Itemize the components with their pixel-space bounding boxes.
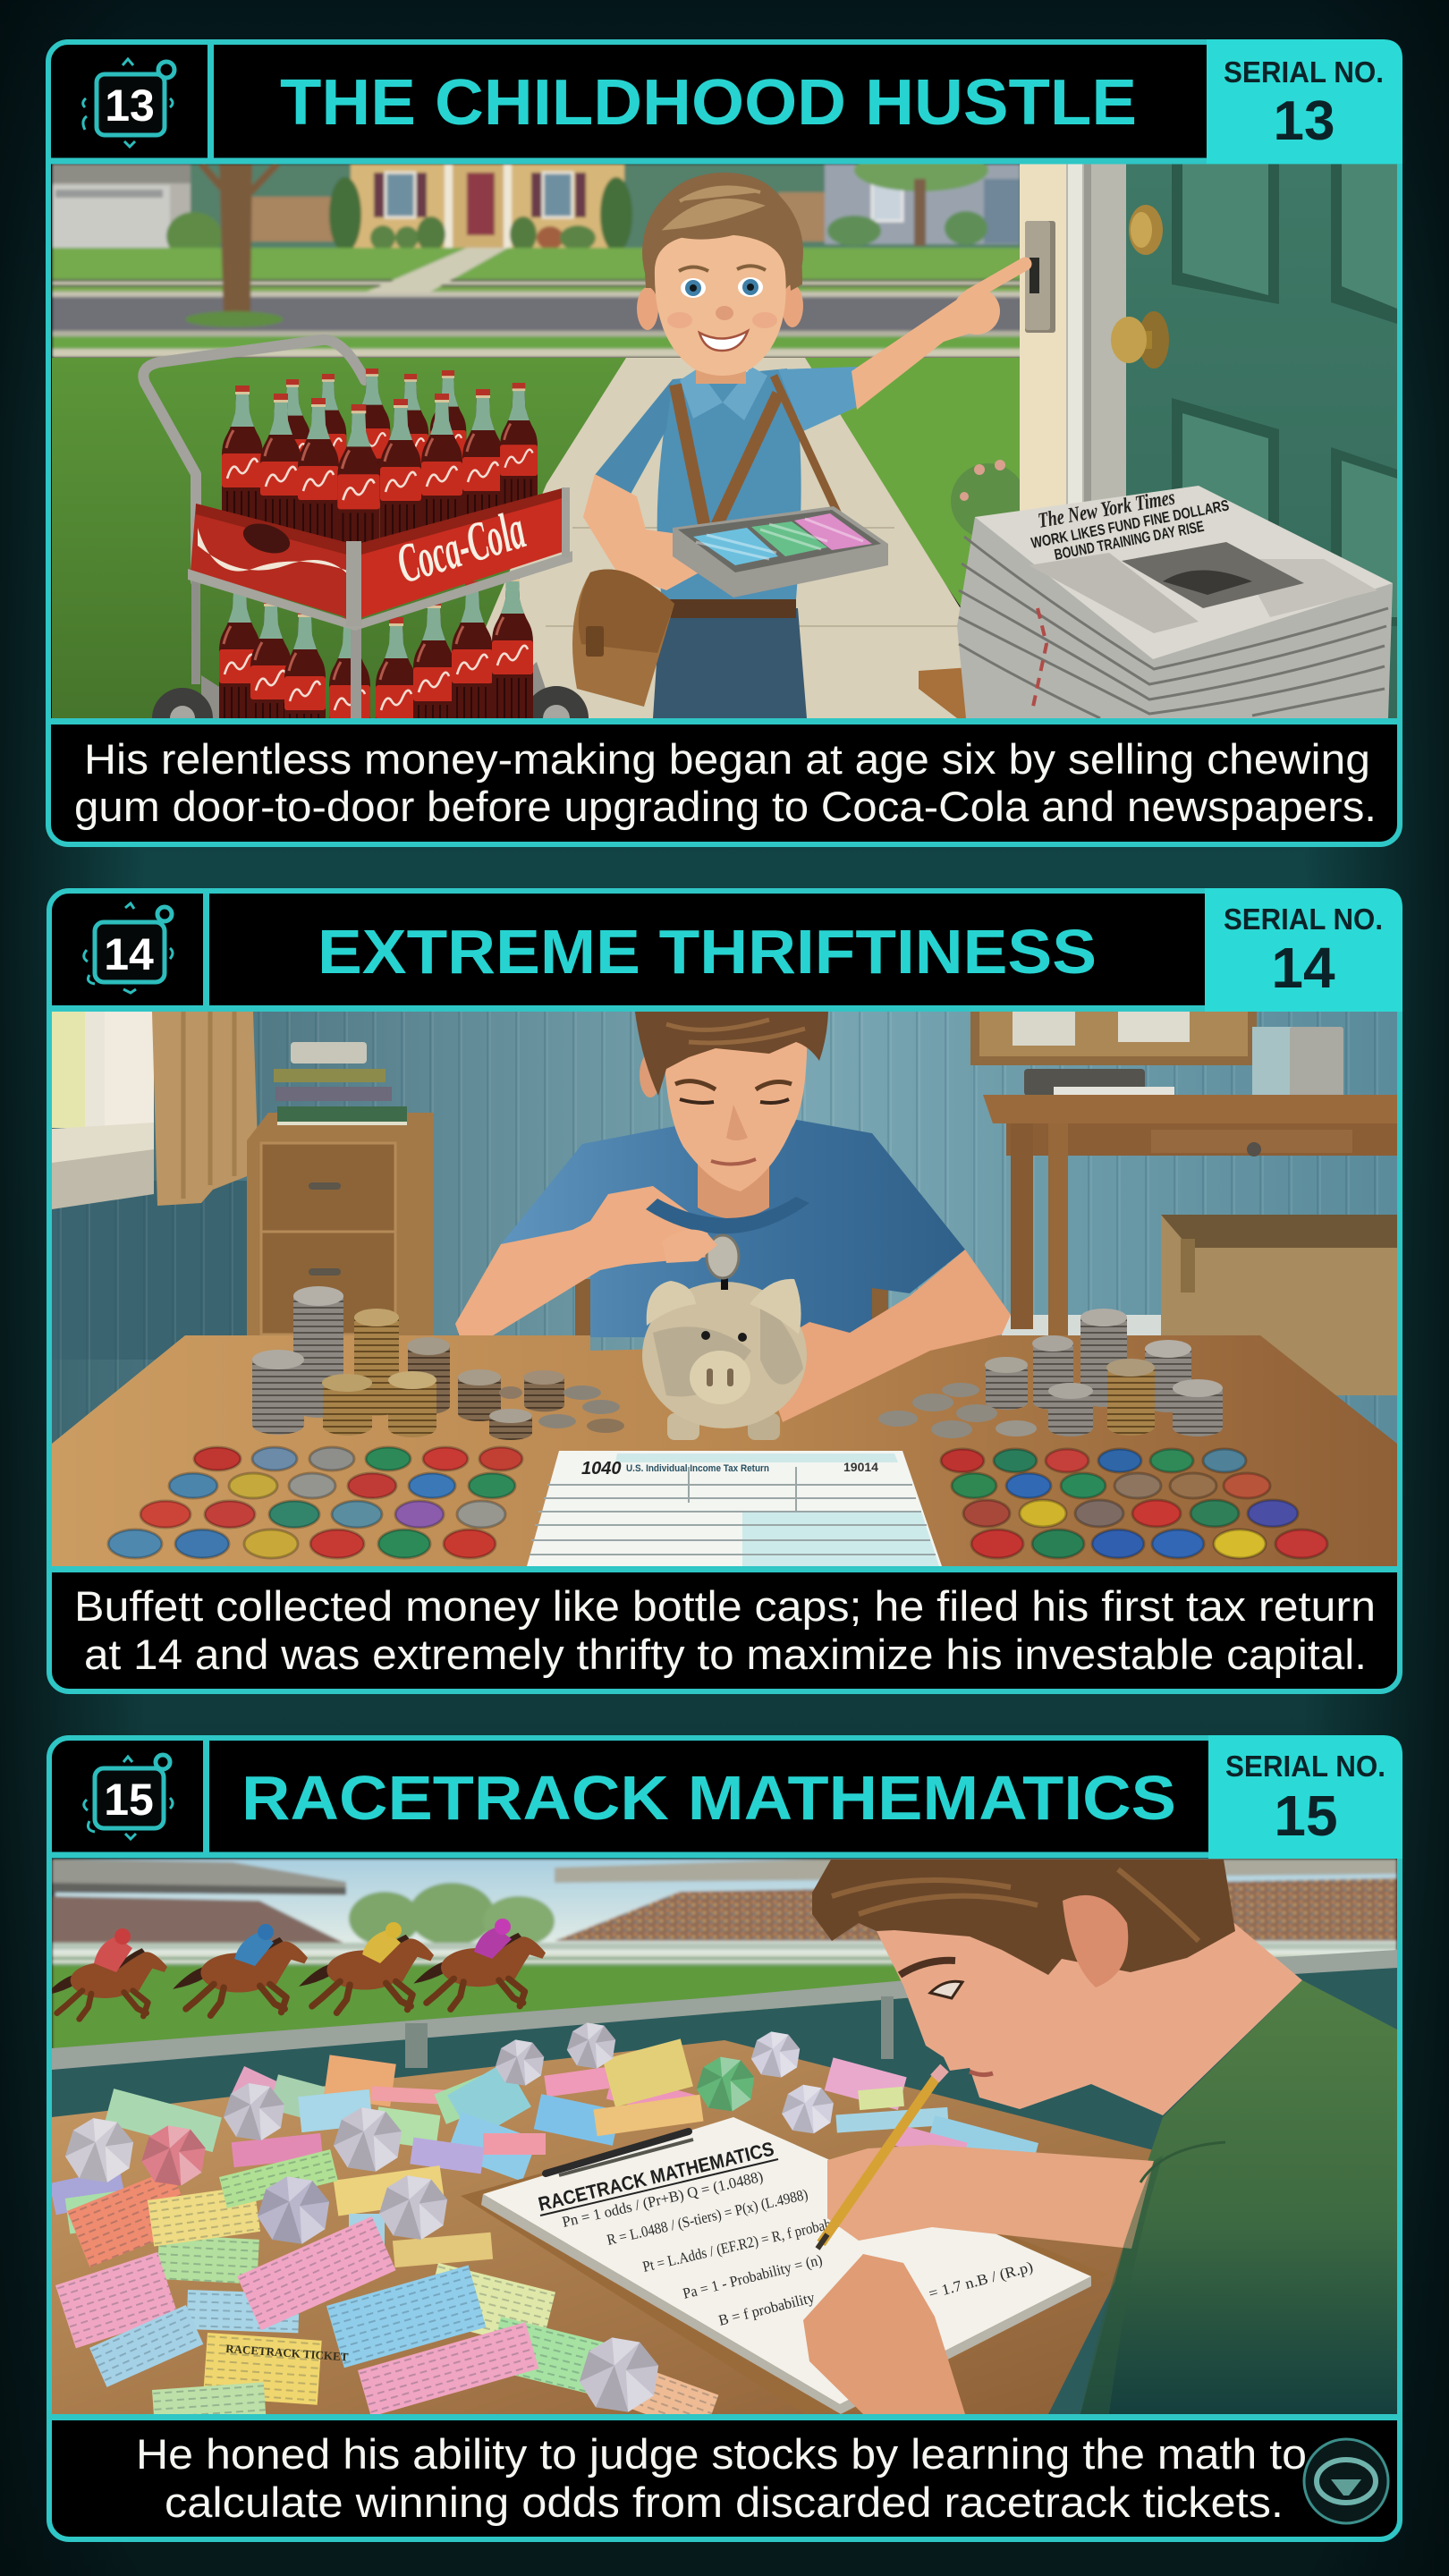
desk and box at right [970,1012,1397,1395]
right-side tickets [825,2057,1038,2165]
teen: green shirt [1080,1980,1397,2414]
clipboard and worksheet: Pa = 1 - Probability = (n) [681,2251,824,2302]
caption 15: He honed his ability to judge stocks by learning the math to [136,2430,1307,2478]
gum tray [673,506,888,597]
watermark logo [1304,2439,1388,2523]
caption 14 [74,1582,1376,1678]
wooden desk [52,2040,1154,2414]
bottle caps: left group [108,1447,522,1558]
clipboard and worksheet: B = f probability [716,2289,817,2329]
green front door [1126,164,1397,718]
illustration: teen calculating odds at the racetrack [45,1859,1397,2436]
shelf and newspaper stack [919,486,1393,718]
coin stacks [252,1286,1223,1440]
bottle caps: right group [941,1449,1327,1558]
right forearm on table [776,1331,1002,1422]
rail and wall [52,1950,1397,2414]
badge number cell 15: 15 [104,1775,154,1825]
badge number cell 13: 13 [105,80,155,131]
shelf and newspaper stack: WORK LIKES FUND FINE DOLLARS [1030,496,1231,552]
serial number tab 14: 14 [1271,936,1335,1000]
coca-cola cart handle [143,340,365,581]
serial number tab 15 [1208,1735,1402,1859]
panel: racetrack mathematics [45,1735,1402,2539]
clipboard and worksheet [461,2117,1109,2414]
caption 14: Buffett collected money like bottle caps; he filed his first tax return [74,1582,1376,1630]
boy: trousers, shirt and straps [595,367,857,718]
form 1040: U.S. Individual Income Tax Return [626,1463,769,1474]
clipboard and worksheet: Pt = L.Adds / (EF.R2) = R, f probability [641,2210,854,2275]
bedroom wall [52,1012,1397,1459]
boy: head and face [637,173,803,384]
door frame [1020,164,1066,513]
red crate: Coca-Cola [390,499,532,595]
brass door hardware [1111,205,1169,369]
distant street [52,148,1027,358]
serial number tab 13: 13 [1274,90,1335,152]
title 15: RACETRACK MATHEMATICS [242,1763,1176,1833]
panel frame 13 [48,42,1400,844]
cart post [351,628,361,718]
panel: the childhood hustle [48,39,1402,844]
readable betting tickets [55,2149,718,2436]
clipboard and worksheet: RACETRACK MATHEMATICS [536,2138,776,2216]
scattered plain tickets [49,2038,704,2334]
dresser and books [247,1042,434,1335]
panel frame 15 [49,1738,1400,2539]
badge number cell 14 [84,894,209,1006]
boy: head [635,1012,828,1233]
serial number tab 14 [1205,888,1402,1012]
form 1040: 19014 [843,1460,878,1474]
badge number cell 15 [84,1741,209,1852]
serial number tab 15: SERIAL NO. [1225,1750,1385,1783]
clipboard and worksheet: R = L.0488 / (S-tiers) = P(x) (L.4988) [606,2186,809,2249]
grandstands and track [52,1859,1397,2055]
shelf and newspaper stack: The New York Times [1037,486,1177,533]
doorbell plate [1025,221,1055,333]
illustration frame lines 14 [49,1009,1400,1569]
serial number tab 15: 15 [1274,1784,1338,1848]
panel frame 14 [49,891,1400,1691]
pencil [818,2068,945,2249]
serial number tab 13: SERIAL NO. [1224,55,1384,89]
clipboard and worksheet: Pn = 1 odds / (Pr+B) Q = (1.0488) [561,2168,765,2231]
shelf and newspaper stack: BOUND TRAINING DAY RISE [1053,518,1206,564]
title 14: EXTREME THRIFTINESS [318,917,1097,987]
lower bottles [219,572,533,718]
title 13: THE CHILDHOOD HUSTLE [280,67,1137,139]
teen: writing arm [827,2142,1225,2249]
wooden table [52,1335,1397,1566]
serial number tab 13 [1207,39,1402,164]
upper bottles [222,369,538,561]
form 1040: 1040 [581,1459,621,1479]
ceramic piggy bank [642,1230,807,1440]
red crate [188,487,572,631]
clipboard and worksheet: = 1.7 n.B / (R.p) [927,2258,1035,2302]
racing horses and jockeys [45,1919,546,2019]
caption 13 [74,735,1377,830]
teen: hair and facial details [812,1860,1235,2075]
teen: steadying hand [803,2254,965,2414]
sleeve seam shading [1080,2156,1163,2414]
illustration: boy selling gum door-to-door [52,165,1397,718]
readable betting tickets: RACETRACK TICKET [225,2342,349,2364]
boy: shirt and arms [455,1118,1011,1422]
teen: head and neck skin [877,1869,1302,2115]
badge number cell 14: 14 [104,929,154,979]
leather satchel [572,570,674,707]
illustration frame lines 15 [49,1855,1400,2417]
caption 13: gum door-to-door before upgrading to Coca-Cola and newspapers. [74,783,1377,830]
cart base [152,581,589,718]
caption 14: at 14 and was extremely thrifty to maximize his investable capital. [84,1631,1367,1678]
badge number cell 13 [83,45,214,158]
serial number tab 14: SERIAL NO. [1224,902,1383,936]
panel: extreme thriftiness [49,888,1402,1691]
lawns and path [52,358,642,718]
illustration frame lines 13 [49,161,1400,721]
window and curtain [52,1012,258,1209]
caption 15: calculate winning odds from discarded racetrack tickets. [165,2479,1284,2526]
form 1040 [527,1451,942,1566]
caption 15 [136,2430,1307,2526]
crumpled paper balls [65,2022,834,2412]
caption 13: His relentless money-making began at age six by selling chewing [84,735,1370,783]
boy: arms [583,264,1025,590]
illustration: boy saving coins in a piggy bank [52,1012,1397,1566]
